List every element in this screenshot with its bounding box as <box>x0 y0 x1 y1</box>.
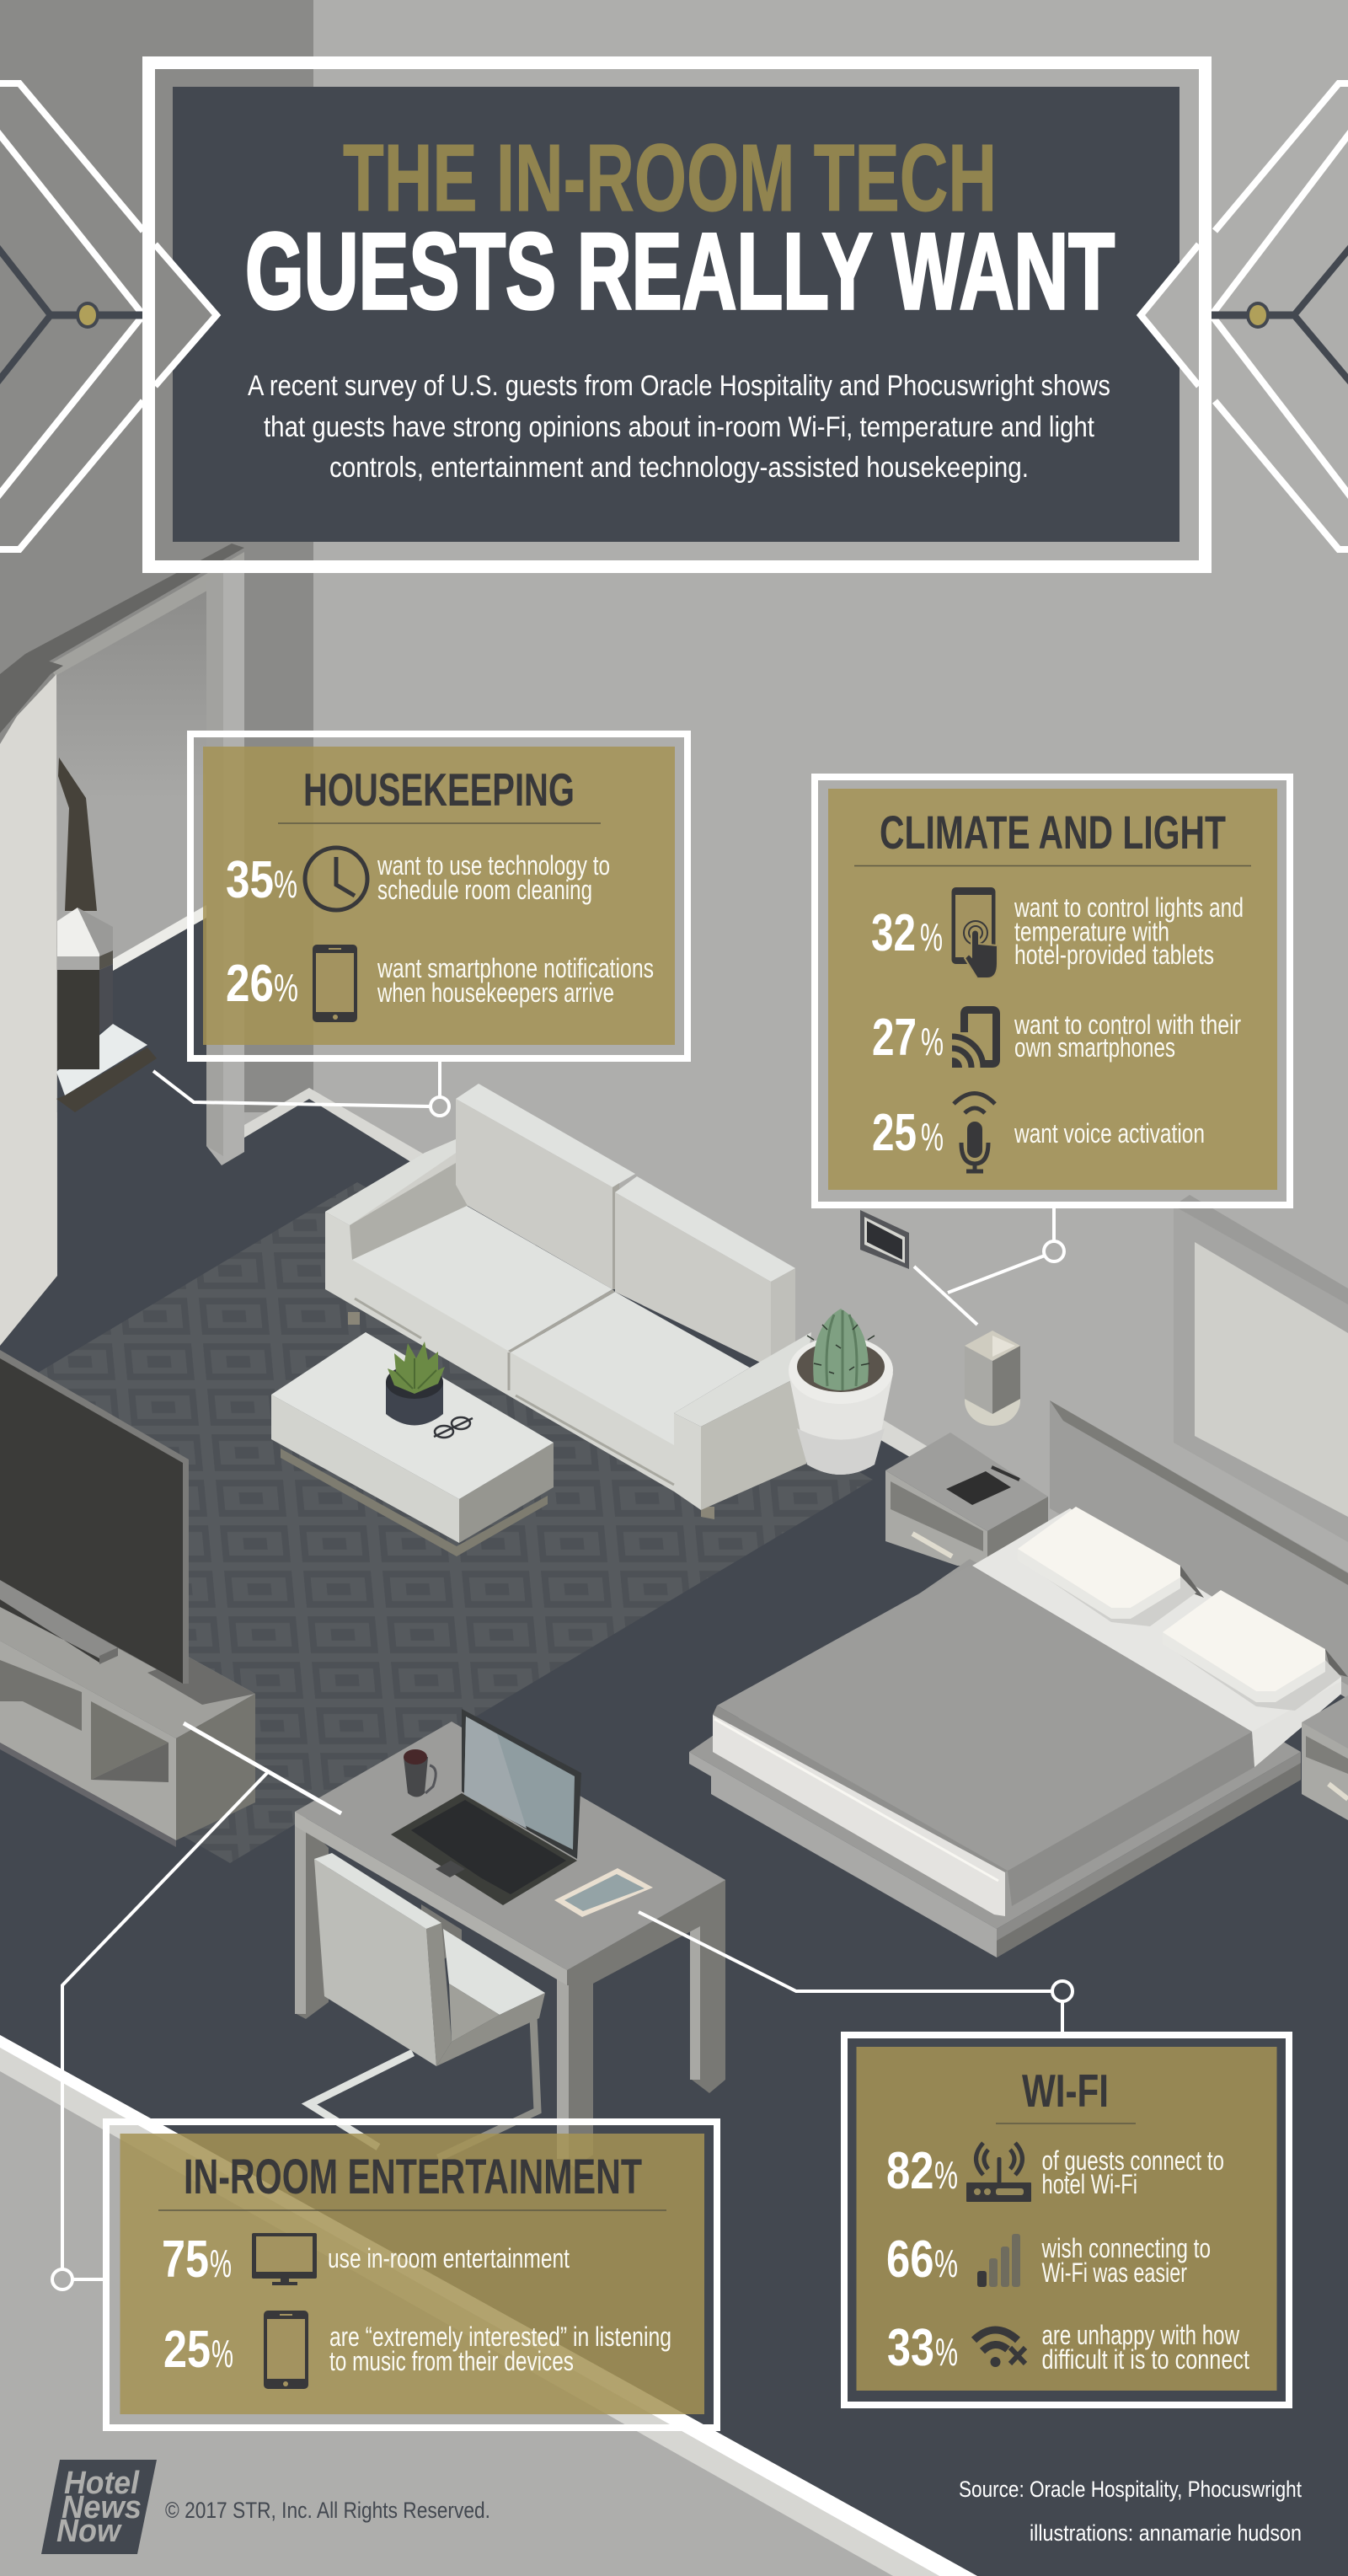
television <box>0 1350 189 1684</box>
stat: 66%: wish connecting to <box>1041 2233 1211 2263</box>
panel: wi-fi <box>844 2035 1289 2405</box>
heading: housekeeping: HOUSEKEEPING <box>303 763 575 816</box>
heading: wi-fi: WI-FI <box>1022 2065 1109 2117</box>
illustration credit: illustrations: annamarie hudson <box>1030 2520 1302 2546</box>
panel: housekeeping <box>190 734 687 1058</box>
cactus in pot <box>789 1309 893 1475</box>
logo: hotel news now: News <box>62 2490 142 2525</box>
stat: 75%: use in-room entertainment <box>328 2243 570 2273</box>
lower-left floor edge and wall <box>0 2035 977 2576</box>
stat: 27%: want to control with their <box>1014 1010 1241 1040</box>
nightstand <box>885 1433 1048 1567</box>
stat: 25%: 25 <box>872 1104 917 1162</box>
stat: 82%: 82 <box>886 2142 933 2200</box>
stat: 32%: % <box>920 915 943 959</box>
stat: 26%: want smartphone notifications <box>377 953 654 983</box>
right chevron ornament <box>1212 83 1348 549</box>
title panel frame <box>148 62 1205 566</box>
heading: in-room entertainment: IN-ROOM ENTERTAINMENT <box>184 2150 642 2204</box>
left chevron ornament <box>0 83 143 549</box>
stat: 27%: 27 <box>872 1009 917 1067</box>
panel: climate and light <box>815 777 1290 1205</box>
stat: 25%: % <box>921 1115 944 1159</box>
connector: climate and light <box>914 1208 1064 1325</box>
intro paragraph: A recent survey of U.S. guests from Oracle Hospitality and Phocuswright shows <box>248 370 1110 402</box>
connector: wifi <box>639 1912 1073 2032</box>
intro paragraph: that guests have strong opinions about in-room Wi-Fi, temperature and light <box>264 411 1094 443</box>
title panel <box>148 62 1205 566</box>
stat: 75%: 75 <box>162 2231 209 2289</box>
mug <box>404 1749 436 1797</box>
chevron tips inside frame <box>155 244 1199 386</box>
stat: 82%: of guests connect to <box>1041 2145 1224 2176</box>
stat: 75%: % <box>210 2241 232 2285</box>
potted succulent <box>386 1342 445 1426</box>
connector: housekeeping <box>153 1061 449 1116</box>
stat: 75% <box>162 2231 570 2289</box>
stat: 66% <box>886 2231 1211 2289</box>
title panel background <box>173 87 1180 542</box>
stat: 66%: Wi-Fi was easier <box>1041 2257 1187 2288</box>
stat: 35% <box>226 848 610 910</box>
stat: 27% <box>872 1009 1241 1068</box>
stat: 82%: hotel Wi-Fi <box>1041 2169 1137 2199</box>
right nightstand <box>1302 1695 1348 1820</box>
stat: 35%: 35 <box>226 851 274 909</box>
stat: 25%: % <box>211 2332 233 2375</box>
floor standing appliance <box>56 758 157 1112</box>
glasses <box>434 1417 473 1438</box>
stat: 33% <box>887 2319 1249 2377</box>
stat: 32%: temperature with <box>1014 917 1169 947</box>
logo: hotel news now: Now <box>56 2514 122 2549</box>
heading: climate and light: CLIMATE AND LIGHT <box>880 806 1226 859</box>
stat: 32% <box>871 887 1244 978</box>
smartphone on desk <box>554 1868 653 1917</box>
stat: 25%: to music from their devices <box>329 2346 574 2376</box>
headboard <box>1050 1400 1348 1685</box>
chair <box>309 1853 545 2158</box>
stat: 26% <box>226 945 654 1022</box>
floor <box>0 918 1348 2576</box>
stat: 25%: are “extremely interested” in listening <box>329 2322 671 2352</box>
stat: 25% <box>872 1094 1205 1171</box>
stat: 35%: schedule room cleaning <box>377 875 592 905</box>
panel: in-room entertainment <box>106 2122 717 2428</box>
stat: 32%: 32 <box>871 904 916 962</box>
television console <box>0 1593 255 1847</box>
lamp <box>965 1331 1020 1426</box>
stat: 82%: % <box>934 2153 958 2197</box>
sofa <box>325 1084 811 1519</box>
stat: 35%: want to use technology to <box>377 850 610 881</box>
laptop <box>391 1709 581 1905</box>
rug <box>0 1182 873 1863</box>
light switch panel <box>860 1210 909 1269</box>
stat: 66%: 66 <box>886 2231 933 2289</box>
baseboards <box>113 905 935 1462</box>
stat: 33%: are unhappy with how <box>1041 2320 1240 2350</box>
stat: 82% <box>886 2142 1224 2202</box>
artwork on wall <box>1174 1195 1348 1542</box>
intro paragraph: controls, entertainment and technology-assisted housekeeping. <box>329 452 1029 484</box>
stat: 66%: % <box>934 2241 958 2285</box>
stat: 26%: % <box>274 966 298 1010</box>
stat: 27%: % <box>921 1020 944 1063</box>
coffee table <box>271 1332 554 1556</box>
desk <box>295 1722 725 2167</box>
title: THE IN-ROOM TECH <box>343 125 997 231</box>
stat: 33%: % <box>935 2330 958 2374</box>
connector: entertainment <box>52 1723 341 2289</box>
stat: 26%: 26 <box>226 955 274 1013</box>
stat: 33%: 33 <box>887 2319 934 2377</box>
intro paragraph <box>248 370 1110 484</box>
logo: hotel news now: Hotel <box>64 2466 140 2501</box>
stat: 33%: difficult it is to connect <box>1041 2344 1249 2375</box>
stat: 32%: hotel-provided tablets <box>1014 940 1214 970</box>
stat: 25%: 25 <box>163 2321 211 2379</box>
copyright: © 2017 STR, Inc. All Rights Reserved. <box>165 2498 490 2523</box>
stat: 25% <box>163 2311 671 2389</box>
stat: 27%: own smartphones <box>1014 1032 1175 1063</box>
stat: 25%: want voice activation <box>1014 1118 1205 1149</box>
logo: hotel news now <box>41 2460 157 2554</box>
stat: 26%: when housekeepers arrive <box>377 977 614 1008</box>
stat: 35%: % <box>274 862 297 906</box>
bed <box>689 1507 1348 1957</box>
stat: 32%: want to control lights and <box>1014 892 1244 923</box>
